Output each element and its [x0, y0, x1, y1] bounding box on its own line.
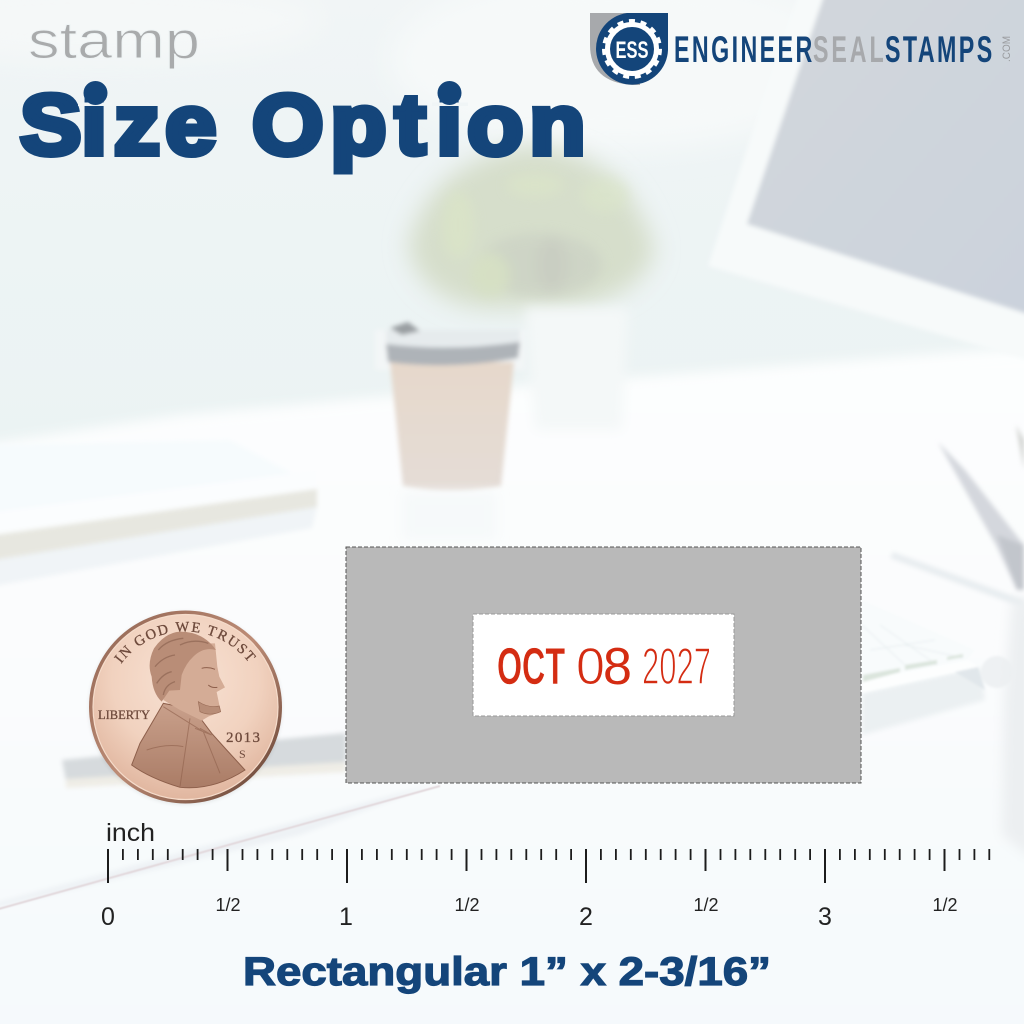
main heading: Size Option: Size Option — [20, 77, 585, 172]
ruler inch numbers: 3 — [818, 903, 832, 931]
logo .com: .COM — [1001, 36, 1013, 62]
ruler ticks — [108, 849, 989, 883]
stamp outer area — [346, 547, 861, 783]
ruler half-inch labels: 1/2 — [932, 895, 958, 915]
date: OCT: OCT — [497, 638, 565, 696]
desk pen and edge — [0, 733, 440, 908]
coin text: date: 2013 — [226, 730, 260, 746]
coin text: mint mark: S — [239, 747, 246, 761]
date: 2027: 2027 — [642, 638, 711, 696]
logo text — [674, 28, 992, 70]
vase — [525, 308, 628, 430]
pencils — [890, 425, 1024, 608]
stamp impression area — [473, 614, 734, 716]
keyboard — [862, 600, 1013, 735]
logo text: STAMPS — [885, 28, 992, 70]
ruler half-inch labels: 1/2 — [454, 895, 480, 915]
plant — [408, 145, 655, 308]
icon: ESS gear seal: ESS — [616, 37, 648, 64]
ruler inch numbers: 1 — [339, 903, 353, 931]
ruler half-inch labels: 1/2 — [215, 895, 241, 915]
logo text: SEAL — [813, 28, 884, 70]
ruler inch numbers: 0 — [101, 903, 115, 931]
date: 08: 0 — [576, 638, 605, 696]
logo: Engineer Seal Stamps — [590, 13, 1013, 85]
ruler inch numbers — [101, 903, 832, 931]
date: 08: 8 — [603, 638, 632, 696]
coffee cup — [375, 322, 525, 491]
monitor — [708, 0, 1024, 362]
ruler half-inch labels: 1/2 — [693, 895, 719, 915]
small heading: stamp: stamp — [28, 12, 200, 70]
icon: ESS gear seal — [590, 13, 668, 85]
ruler half-inch labels — [215, 895, 958, 915]
ruler unit label: inch — [106, 819, 155, 847]
Lincoln portrait — [132, 632, 245, 788]
ruler — [101, 819, 989, 931]
notebook — [0, 440, 317, 586]
coin text: LIBERTY: LIBERTY — [98, 708, 150, 722]
penny coin — [88, 610, 282, 805]
ruler inch numbers: 2 — [579, 903, 593, 931]
logo text: ENGINEER — [674, 28, 812, 70]
coin inscription: IN GOD WE TRUST — [114, 622, 256, 664]
size caption: Rectangular 1” x 2-3/16” — [243, 950, 771, 994]
glass — [1002, 600, 1024, 860]
